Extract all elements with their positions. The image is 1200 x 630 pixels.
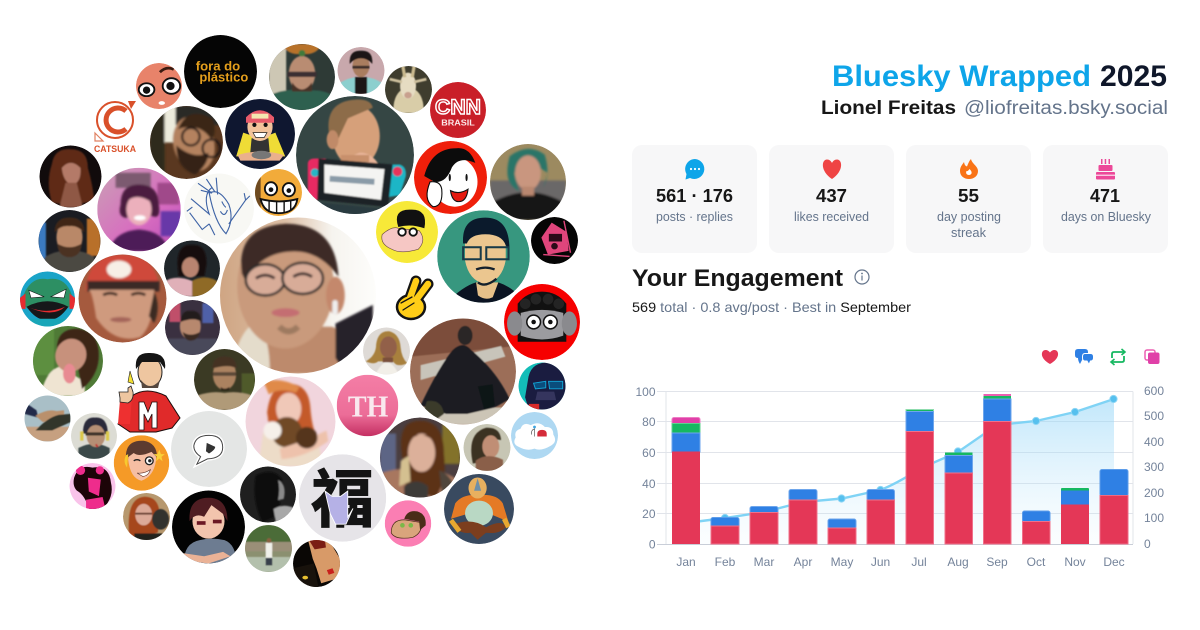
logo: Catsuka: CATSUKA [94, 144, 136, 155]
icon: replies [1075, 349, 1094, 364]
avatar: woman with auburn hair [40, 146, 102, 208]
avatar: CNN Brasil: BRASIL [441, 118, 475, 128]
stat card: day posting streak [906, 145, 1031, 253]
stat card: likes received: 437 [816, 186, 847, 206]
icon: peace hand sticker [397, 281, 428, 319]
engagement summary: 569 total · 0.8 avg/post · Best in September [632, 299, 911, 315]
stat card: days on Bluesky: days on Bluesky [1061, 210, 1152, 224]
avatar: green angry monster [20, 272, 75, 326]
avatar: kanji sticker with cat: 福 [311, 450, 374, 541]
avatar: young woman with dark hair [164, 240, 220, 296]
title year: 2025 [1100, 60, 1167, 93]
bar: Apr [789, 490, 817, 544]
left axis labels: 0 [649, 538, 656, 552]
right axis labels: 100 [1144, 511, 1164, 525]
avatar: Vader with teal background [518, 362, 566, 410]
right axis labels: 200 [1144, 486, 1164, 500]
month labels: Aug [947, 555, 969, 569]
icon: chat bubble [685, 159, 704, 180]
avatar: CNN Brasil [430, 82, 486, 138]
right axis labels: 400 [1144, 435, 1164, 449]
month labels: Sep [986, 555, 1008, 569]
bar: May [828, 519, 856, 544]
avatar: pink Shin-chan [385, 500, 431, 547]
header [821, 60, 1168, 119]
avatar: CNN Brasil: CNN [435, 95, 481, 119]
stat card: posts and replies: posts · replies [656, 210, 733, 224]
month labels: Dec [1103, 555, 1125, 569]
logo: Catsuka [94, 101, 136, 155]
left axis labels: 100 [635, 385, 656, 399]
avatar: woman with headphones [71, 413, 117, 459]
cumulative area [686, 399, 1114, 544]
avatar: pink and black art [531, 217, 578, 264]
avatar bubble cluster [20, 35, 580, 587]
avatar: man in teal shirt [338, 47, 384, 94]
icon: quotes [1145, 350, 1160, 364]
avatar: main profile man with glasses [220, 218, 376, 374]
month labels: Jul [911, 555, 927, 569]
month labels [676, 555, 1125, 569]
avatar: woman with bangs [380, 418, 460, 498]
engagement chart [635, 384, 1164, 569]
icon: reposts [1111, 349, 1125, 365]
avatar: teal background cartoon man [437, 210, 530, 303]
avatar: yellow grinning cartoon [255, 169, 302, 216]
right axis labels [1144, 384, 1164, 551]
avatar: black cloak figure on bench [410, 318, 516, 424]
avatar: beach hiking boots [24, 396, 70, 442]
month labels: May [831, 555, 853, 569]
bar: Aug [945, 452, 972, 544]
left axis labels: 40 [642, 477, 656, 491]
avatar: yellow Shin-chan [376, 201, 438, 263]
display name: Lionel Freitas [821, 98, 956, 119]
bar: Jan [672, 418, 700, 544]
stat card: days on Bluesky [1043, 145, 1168, 253]
bar: Feb [711, 518, 739, 544]
left axis labels: 20 [642, 507, 656, 521]
bar: Oct [1022, 511, 1050, 544]
left axis labels: 60 [642, 446, 656, 460]
stat card: day posting streak: streak [951, 226, 987, 240]
avatar: black and white woman [240, 466, 296, 522]
bar: Sep [984, 394, 1011, 544]
month labels: Jan [676, 555, 696, 569]
month labels: Mar [754, 555, 774, 569]
stacked bars [672, 394, 1128, 544]
stat card: likes received: likes received [794, 210, 869, 224]
avatar: goat [385, 66, 432, 113]
bar: Nov [1061, 488, 1089, 544]
avatar: woman with green hair [490, 144, 566, 220]
icon: heart [823, 160, 841, 179]
avatar: Aang meditating [444, 474, 514, 544]
avatar: man with glasses in forest [194, 349, 255, 410]
avatar: man with glasses tilted [150, 106, 223, 179]
avatar: man by the waterfall [245, 525, 292, 572]
avatar: woman with curly hair [464, 424, 510, 471]
chart legend icons [1042, 349, 1160, 365]
stat card: day posting streak: 55 [958, 186, 979, 206]
left axis labels [635, 385, 656, 552]
avatar: man in neon city [165, 300, 220, 355]
stat card: posts and replies [632, 145, 757, 253]
month labels: Apr [794, 555, 812, 569]
icon: likes [1042, 350, 1058, 364]
title: Bluesky Wrapped [832, 60, 1091, 93]
avatar: purple tinted woman [97, 168, 181, 251]
avatar: man holding game console [296, 96, 414, 219]
handle: @liofreitas.bsky.social [964, 98, 1168, 119]
icon: info [855, 270, 869, 284]
avatar: salmon cartoon face [136, 63, 182, 109]
cumulative line [686, 399, 1114, 523]
avatar: TH logo: TH [348, 390, 388, 424]
bar: Dec [1100, 470, 1128, 544]
avatar: cat and red lips [293, 540, 340, 587]
month labels: Jun [871, 555, 890, 569]
left axis labels: 80 [642, 415, 656, 429]
avatar: man in Mario hat [78, 254, 166, 342]
avatar: woman sticking tongue out [33, 326, 103, 396]
stat card: day posting streak: day posting [937, 210, 1001, 224]
avatar: bearded man [38, 210, 100, 272]
avatar: woman with teddy bear [246, 376, 336, 466]
right axis labels: 600 [1144, 384, 1164, 398]
avatar: gray speech bubble [171, 411, 247, 487]
heading: your engagement: Your Engagement [632, 265, 843, 292]
avatar: woman with golden hair [363, 328, 410, 374]
icon: flame [960, 159, 978, 179]
avatar: cartoon gamer [225, 99, 295, 169]
bar: Jun [867, 490, 894, 544]
stat card: likes received [769, 145, 894, 253]
avatar: red background pixel character [504, 284, 580, 360]
avatar: boy with dark background [172, 490, 245, 564]
right axis labels: 500 [1144, 409, 1164, 423]
bar: Jul [906, 410, 934, 544]
stat card: days on Bluesky: 471 [1090, 186, 1120, 206]
avatar: man with antlers [269, 44, 335, 110]
avatar: TH logo [337, 375, 398, 436]
month labels: Oct [1027, 555, 1046, 569]
right axis labels: 0 [1144, 537, 1151, 551]
cumulative points [682, 395, 1117, 527]
avatar: fora do plastico logo [184, 35, 257, 108]
bar: Mar [750, 506, 778, 544]
chart gridlines and axes [657, 392, 1133, 544]
avatar: cloud on light blue [511, 412, 558, 459]
month labels: Nov [1064, 555, 1086, 569]
avatar: fora do plastico logo: plástico [199, 70, 248, 85]
right axis labels: 300 [1144, 460, 1164, 474]
avatar: blue sketch drawing [184, 174, 254, 244]
month labels: Feb [715, 555, 736, 569]
avatar: redheaded woman [123, 493, 170, 542]
icon: birthday cake [1096, 159, 1115, 180]
avatar: fora do plastico logo: fora do [196, 58, 240, 73]
avatar: red background cartoon [414, 141, 487, 214]
avatar: orange cartoon winking [114, 435, 169, 491]
stat card: posts and replies: 561 · 176 [656, 186, 733, 206]
avatar: pink and black girl [70, 463, 116, 509]
character: M shirt cartoon [118, 353, 180, 432]
